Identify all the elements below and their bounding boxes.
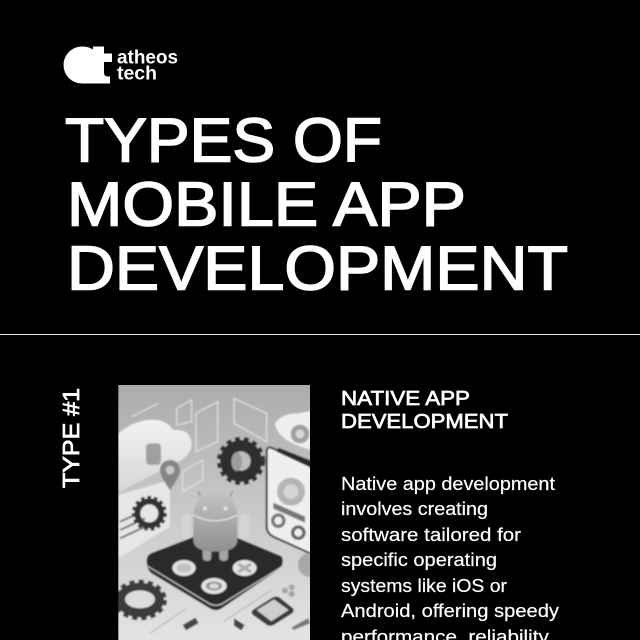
title: DEVELOPMENT	[67, 234, 568, 304]
section description: Android, offering speedy	[341, 600, 560, 621]
logo: atheos tech	[64, 46, 178, 84]
type label: TYPE #1	[58, 388, 84, 488]
android robot	[182, 514, 190, 526]
title	[65, 106, 568, 304]
map pin	[160, 460, 180, 490]
right sphere	[298, 552, 310, 578]
section heading: DEVELOPMENT	[341, 410, 509, 433]
title: TYPES OF	[65, 106, 382, 176]
illustration: native app development	[118, 385, 310, 640]
section description: involves creating	[341, 498, 488, 519]
top right cloud	[274, 410, 310, 450]
left card	[118, 482, 170, 558]
section heading	[341, 387, 509, 433]
section description: software tailored for	[341, 524, 521, 545]
section description	[341, 473, 560, 640]
main phone	[147, 530, 283, 610]
section description: Native app development	[341, 473, 555, 494]
rounded tile	[252, 596, 294, 626]
cloud	[118, 419, 192, 492]
right phone	[264, 446, 310, 554]
section description: specific operating	[341, 549, 497, 570]
small parts	[183, 618, 199, 630]
logo: atheos tech: tech	[117, 64, 157, 84]
section description: systems like iOS or	[341, 575, 507, 596]
section heading: NATIVE APP	[341, 387, 470, 410]
top gear	[226, 446, 256, 476]
divider line	[0, 334, 640, 335]
title: MOBILE APP	[67, 170, 466, 240]
logo: atheos tech: atheos	[117, 48, 178, 68]
left gear	[137, 501, 161, 525]
floating interface cards	[132, 398, 267, 492]
bottom gear	[116, 583, 164, 617]
